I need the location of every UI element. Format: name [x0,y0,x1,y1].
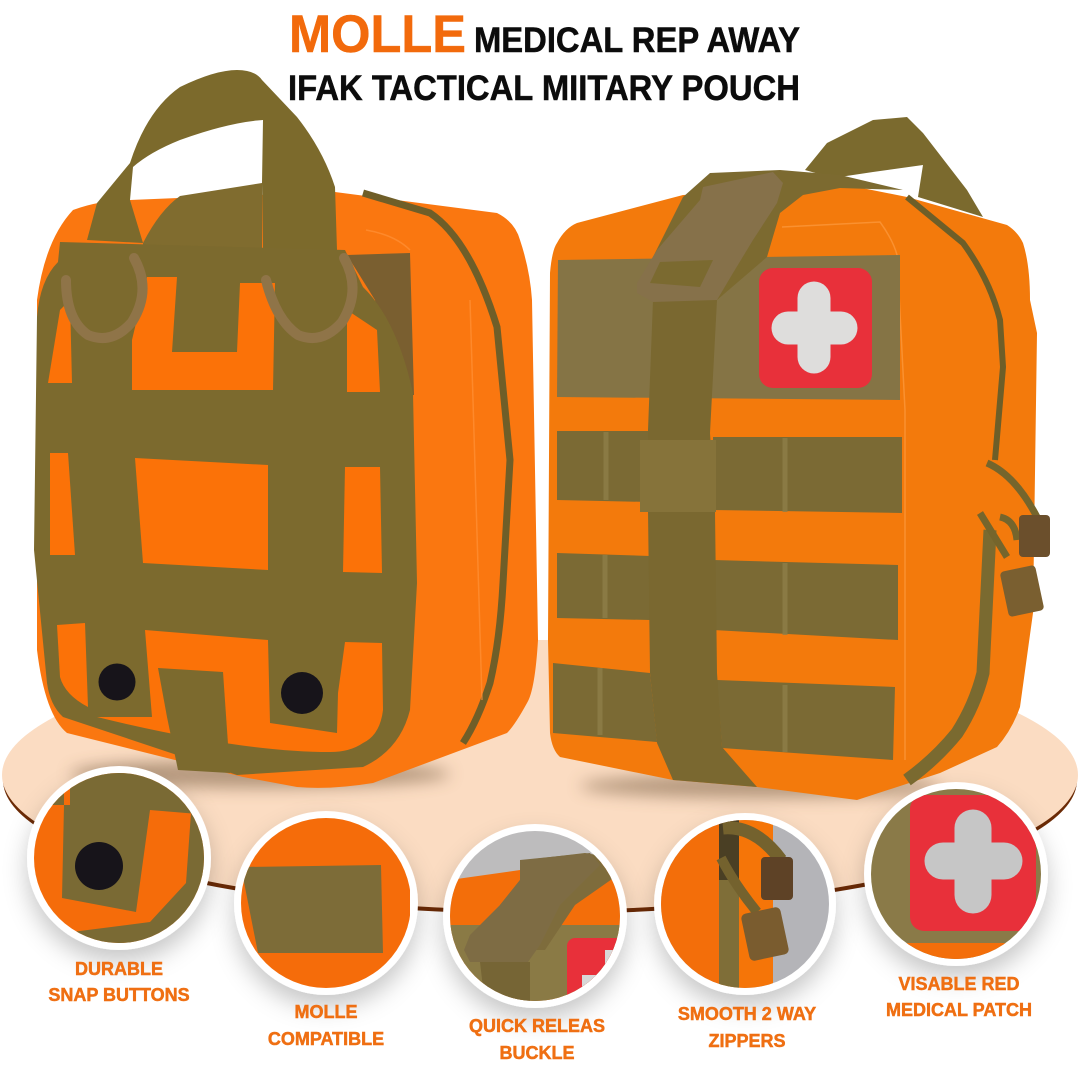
label: smooth zippers: ZIPPERS [708,1031,786,1051]
molle strap 1 [557,431,902,513]
circle: smooth zippers [654,813,836,995]
snap button left [98,664,136,700]
handle [87,70,337,250]
molle strap 2 [557,553,898,640]
label: durable snap buttons: DURABLE [75,959,163,979]
peach display platform [2,640,1078,914]
orange windows [48,277,383,752]
bottom tab [158,668,230,773]
label: smooth zippers: SMOOTH 2 WAY [678,1004,816,1024]
dark tan side patch [347,253,414,395]
d-ring right [266,258,353,338]
tan front flap [34,242,417,775]
tan dome behind handle [143,183,262,255]
label: red medical patch [886,974,1032,1020]
zipper pulls [980,463,1050,617]
label: quick release buckle [469,1016,605,1063]
circle: snap buttons [27,766,211,960]
d-ring left [66,258,143,338]
label: red medical patch: VISABLE RED [898,974,1020,994]
label: molle compatible: MOLLE [294,1002,358,1022]
label: durable snap buttons: SNAP BUTTONS [48,985,190,1005]
circle: molle compatible [234,811,418,995]
molle strap 3 [553,663,895,760]
title: MOLLE [289,5,466,64]
circle: quick release buckle [443,824,629,1008]
strap stitch seams [600,432,785,752]
label: molle compatible: COMPATIBLE [268,1029,384,1049]
tan velcro panel [557,255,900,400]
label: red medical patch: MEDICAL PATCH [886,1000,1032,1020]
side zipper lower [907,530,990,780]
stitching above velcro [782,222,905,760]
diagonal strap over top [653,170,903,300]
left pouch: back view [34,70,538,788]
label: durable snap buttons [48,959,190,1005]
strap keeper [640,440,716,512]
right pouch: front view [548,117,1050,800]
handle [805,117,983,217]
title: IFAK TACTICAL MIITARY POUCH [288,69,800,108]
zipper [363,193,510,743]
medical patch [759,268,872,388]
circle: red patch [864,782,1048,966]
label: quick release buckle: BUCKLE [500,1043,574,1063]
label: molle compatible [268,1002,384,1049]
snap button right [281,672,323,714]
side stitching [366,230,482,700]
label: quick release buckle: QUICK RELEAS [469,1016,605,1036]
title: MEDICAL REP AWAY [474,21,800,60]
label: smooth zippers [678,1004,816,1051]
pouch orange shell [37,192,538,788]
side zipper upper [907,197,1003,460]
pouch body [548,183,1037,800]
title [288,5,800,108]
plastic buckle [637,172,783,302]
vertical webbing [648,300,757,787]
